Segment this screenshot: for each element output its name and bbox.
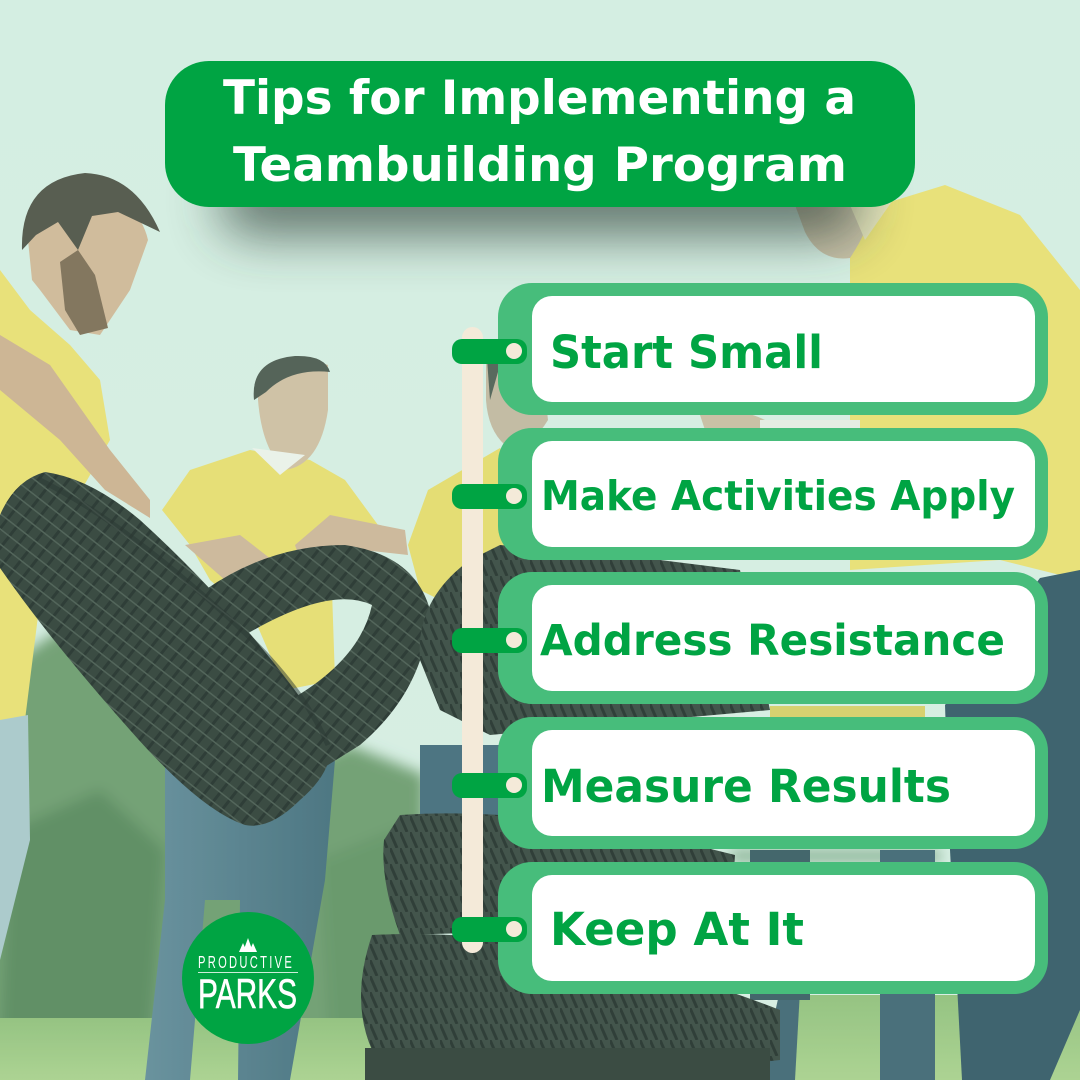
front tire held by left man	[0, 472, 331, 826]
list item: Keep At It	[452, 862, 1048, 994]
center tire	[205, 545, 430, 770]
trees	[0, 630, 940, 1040]
center man: head, shirt, jeans and arms	[145, 356, 408, 1080]
stacked tires	[361, 813, 780, 1080]
connector pin	[452, 773, 527, 798]
title text	[223, 71, 856, 193]
logo: Productive Parks: PARKS	[198, 970, 297, 1017]
connector pin	[452, 917, 527, 942]
title text: Tips for Implementing a	[223, 71, 856, 126]
list item: Address Resistance	[452, 572, 1048, 704]
logo: Productive Parks	[182, 912, 314, 1044]
list item: Make Activities Apply	[452, 428, 1048, 560]
title shadow	[220, 165, 860, 235]
icon: trees	[239, 938, 257, 952]
timeline vertical bar	[462, 327, 483, 953]
list item: Make Activities Apply: Make Activities Apply	[541, 472, 1015, 520]
list item: Measure Results	[452, 717, 1048, 849]
back large tire	[420, 545, 770, 735]
list item: Start Small	[452, 283, 1048, 415]
logo: Productive Parks: PRODUCTIVE	[198, 952, 294, 973]
left man: head, shirt, arms and jeans	[0, 173, 160, 960]
woman at right: shirt, head and dark trousers	[700, 180, 1080, 1080]
list item: Measure Results: Measure Results	[541, 760, 951, 813]
man in the back: head, shirt and jeans	[408, 342, 560, 860]
list item: Keep At It: Keep At It	[550, 903, 804, 956]
connector pin	[452, 484, 527, 509]
connector pin	[452, 339, 527, 364]
title panel	[165, 61, 915, 207]
connector pin	[452, 628, 527, 653]
list item: Address Resistance: Address Resistance	[540, 616, 1005, 666]
grass	[0, 1018, 1080, 1080]
list item: Start Small: Start Small	[550, 326, 823, 379]
title text: Teambuilding Program	[233, 138, 847, 193]
